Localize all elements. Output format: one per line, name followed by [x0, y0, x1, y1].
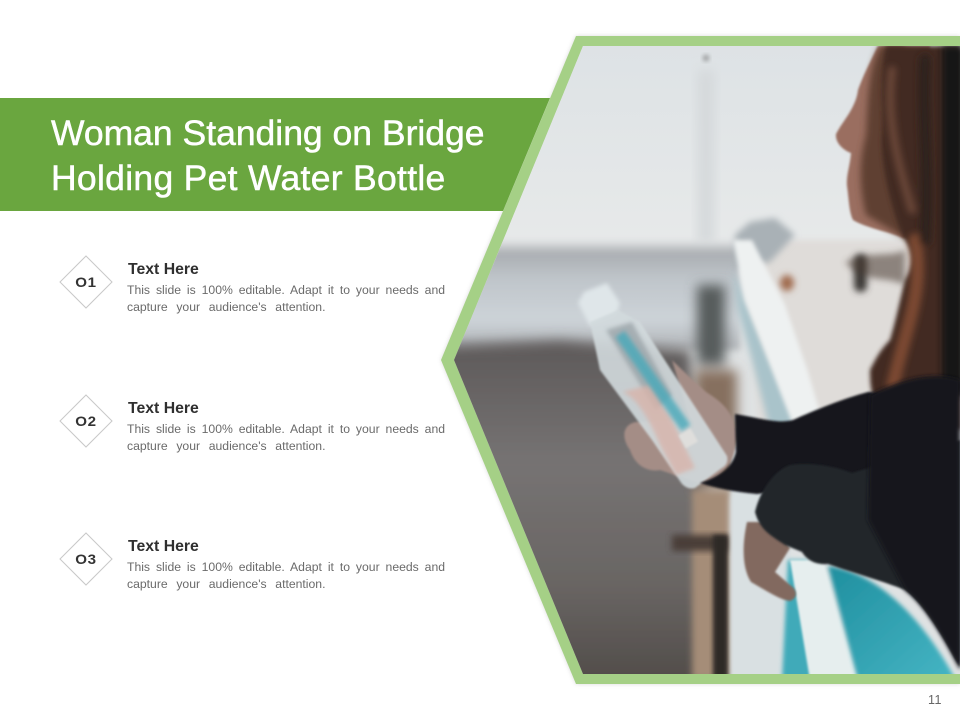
photo: white railing lower	[790, 560, 858, 680]
photo: distant pier building	[735, 218, 795, 268]
photo: pier deck	[766, 240, 908, 406]
body text 01: capture your audience's attention.	[127, 300, 325, 314]
photo: blurred sky	[493, 46, 583, 264]
item 01	[60, 256, 445, 314]
hexagon photo frame	[441, 36, 960, 684]
item 02	[60, 394, 445, 452]
photo: face	[836, 46, 930, 238]
title	[50, 113, 485, 198]
heading 02: Text Here	[128, 400, 199, 417]
header band	[0, 98, 550, 211]
photo: base backdrop	[440, 40, 960, 680]
photo: dark edge of hair	[942, 46, 960, 396]
photo: hair side strands over face	[861, 46, 905, 238]
body text 03	[127, 560, 445, 590]
photo: lower hand on rail	[744, 522, 796, 601]
heading 03: Text Here	[128, 538, 199, 555]
photo: blurred water	[420, 240, 740, 350]
body text 02: This slide is 100% editable. Adapt it to your needs and	[127, 422, 445, 436]
photo: jacket lower sleeve	[755, 440, 960, 668]
page number: 11	[928, 693, 942, 707]
body text 01: This slide is 100% editable. Adapt it to your needs and	[127, 283, 445, 297]
photo: long brown hair	[870, 46, 960, 430]
number 01: O1	[75, 274, 97, 290]
photo: distant figures	[780, 254, 867, 292]
photo: hair wisp	[845, 250, 905, 285]
diamond badge 02	[60, 394, 112, 448]
photo: water bottle	[578, 283, 727, 488]
photo: bottle cap	[578, 283, 620, 326]
number 03: O3	[75, 551, 97, 567]
title: Holding Pet Water Bottle	[51, 158, 446, 198]
title: Woman Standing on Bridge	[51, 113, 485, 153]
photo: blurred ground	[454, 332, 708, 674]
body text 02: capture your audience's attention.	[127, 438, 325, 452]
photo: lamp post top	[702, 54, 710, 62]
photo: jacket sleeve holding bottle	[700, 390, 877, 496]
item 03	[60, 532, 445, 590]
photo: pale blue rail shadow	[734, 281, 792, 422]
photo: pale lower deck	[728, 442, 740, 674]
photo: woman on bridge holding water bottle	[420, 40, 960, 690]
body text 03: This slide is 100% editable. Adapt it to your needs and	[127, 560, 445, 574]
photo: teal bottle lettering	[620, 334, 686, 428]
number 02: O2	[75, 413, 97, 429]
photo: distant lamp post	[698, 70, 714, 250]
photo: hair highlights	[890, 60, 927, 385]
photo: jacket torso	[868, 376, 960, 670]
body text 01	[127, 283, 445, 314]
photo: bottle inner grey label	[606, 322, 672, 410]
photo: fingers seen through bottle	[622, 385, 695, 475]
heading 01: Text Here	[128, 261, 199, 278]
photo: hand gripping bottle	[624, 360, 737, 485]
diamond badge 03	[60, 532, 112, 586]
photo: tan bridge post	[672, 490, 730, 680]
photo: bottle white label	[678, 428, 698, 448]
body text 03: capture your audience's attention.	[127, 576, 325, 590]
diamond badge 01	[60, 256, 112, 308]
photo: bottle body	[590, 310, 727, 488]
photo: teal bridge panel	[828, 566, 956, 680]
body text 02	[127, 422, 445, 452]
photo: dark pier posts	[695, 285, 737, 490]
photo: white railing upper	[733, 240, 825, 430]
photo: teal glass under rail	[778, 556, 810, 674]
